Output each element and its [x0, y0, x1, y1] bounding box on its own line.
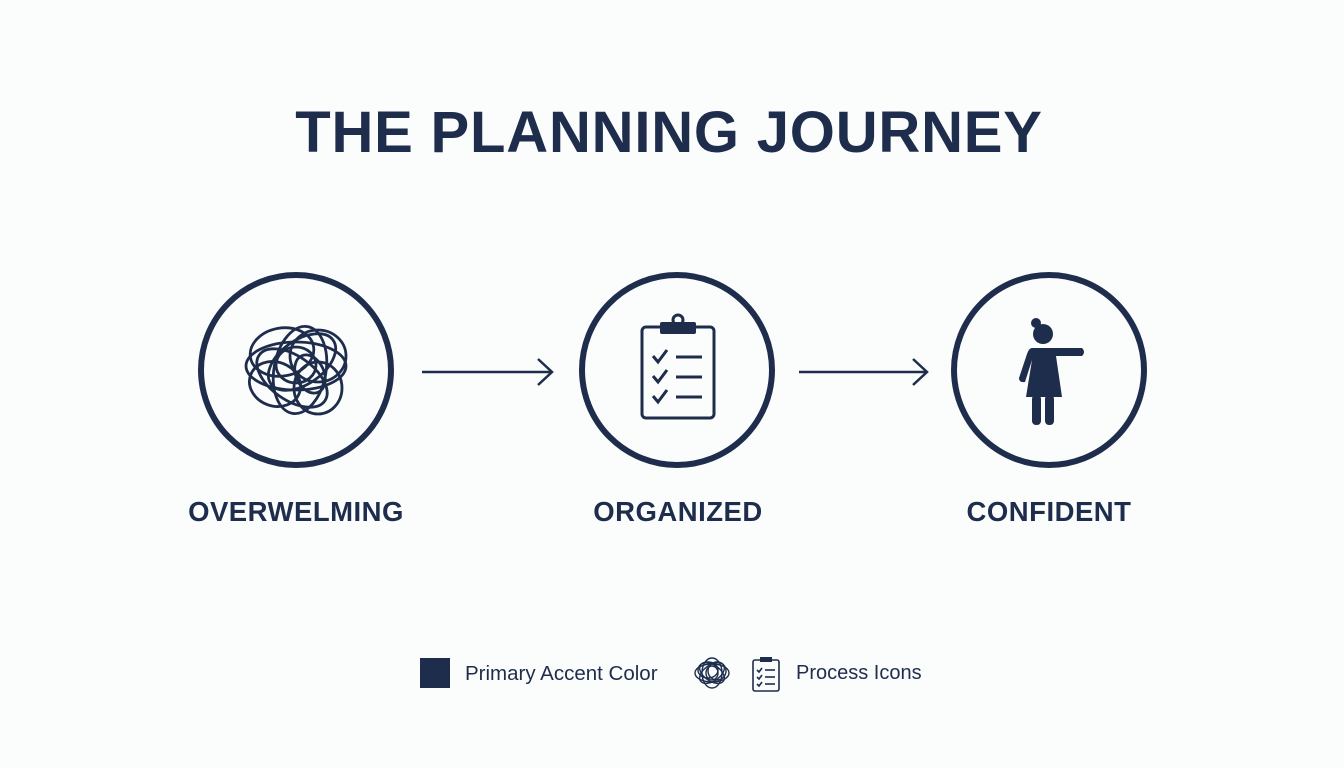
label: confident: CONFIDENT: [967, 496, 1131, 527]
legend text: primary accent color: Primary Accent Color: [465, 662, 658, 685]
legend: [420, 657, 922, 692]
legend icons: [694, 657, 780, 692]
label: organized: ORGANIZED: [593, 496, 763, 527]
legend text: process icons: Process Icons: [796, 662, 922, 684]
step 2: organized circle with clipboard: [582, 275, 772, 465]
step 1: overwelming circle with tangle icon: [201, 275, 391, 465]
label: overwelming: OVERWELMING: [188, 496, 404, 527]
legend swatch: [420, 658, 450, 688]
title: THE PLANNING JOURNEY: [295, 100, 1043, 165]
step 3: confident circle with person: [954, 275, 1144, 465]
arrow 2: [799, 359, 927, 385]
arrow 1: [422, 359, 552, 385]
